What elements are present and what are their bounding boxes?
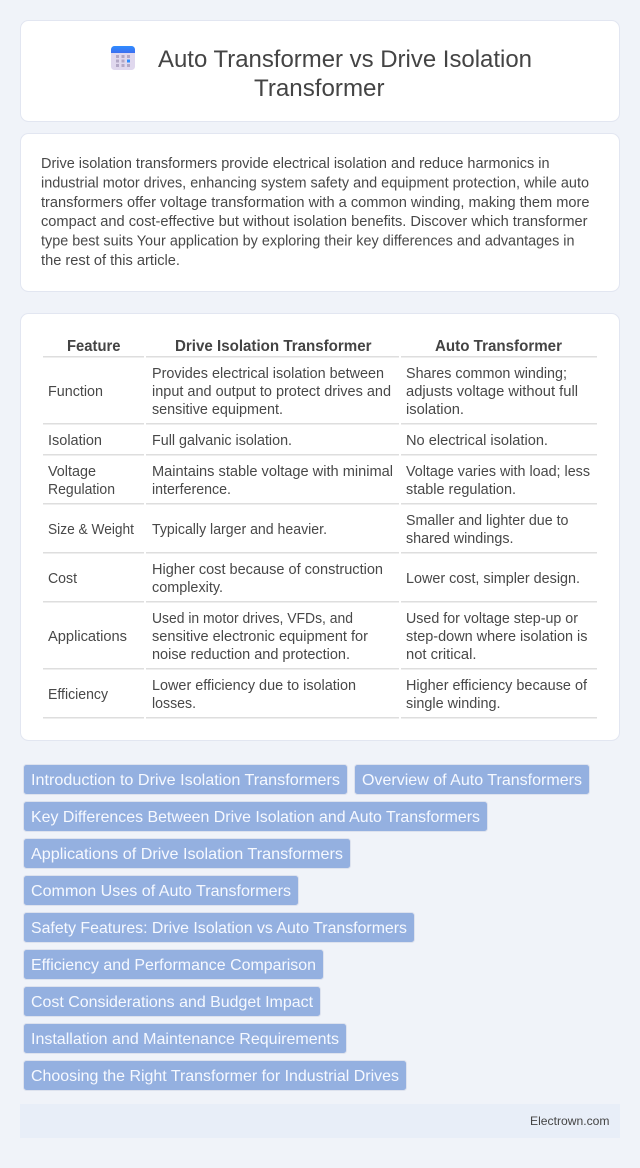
- row: size and weight: [43, 513, 597, 554]
- row: applications: noise reduction and protection.: [152, 647, 350, 663]
- intro text: compact and cost-effective but without isolation benefits. Discover which transformer: [41, 214, 588, 230]
- tag: cost: Cost Considerations and Budget Impact: [31, 994, 314, 1011]
- table header row: Drive Isolation Transformer: [175, 338, 372, 355]
- row: cost: Cost: [48, 571, 77, 587]
- panel: comparison table: [20, 314, 620, 740]
- row: applications: Used in motor drives, VFDs, and: [152, 611, 353, 627]
- row: applications: not critical.: [406, 647, 476, 663]
- panel: introduction: [20, 134, 620, 292]
- row: function: input and output to protect drives and: [152, 384, 391, 400]
- tag: safety features: Safety Features: Drive Isolation vs Auto Transformers: [31, 920, 407, 937]
- intro text: transformers offer voltage transformation with a common winding, making them more: [41, 195, 590, 211]
- row: voltage regulation: Voltage varies with load; less: [406, 464, 590, 480]
- tag: safety features: [24, 912, 414, 942]
- row: cost: [43, 562, 597, 602]
- row: efficiency: Efficiency: [48, 687, 109, 703]
- row: size and weight: Typically larger and heavier.: [152, 522, 327, 538]
- tag: common uses: [24, 876, 298, 906]
- tag: installation: Installation and Maintenance Requirements: [31, 1031, 339, 1048]
- row: function: [43, 366, 597, 424]
- row: efficiency: single winding.: [406, 696, 500, 712]
- row: applications: Applications: [48, 629, 127, 645]
- tag: overview: [354, 764, 590, 794]
- row: efficiency: [43, 678, 597, 718]
- row: efficiency: Higher efficiency because of: [406, 678, 588, 694]
- row: isolation: [43, 433, 597, 456]
- tag: choosing: Choosing the Right Transformer for Industrial Drives: [31, 1068, 399, 1085]
- table header row: [43, 338, 597, 358]
- tag: installation: [24, 1024, 346, 1054]
- row: function: adjusts voltage without full: [406, 384, 578, 400]
- row: voltage regulation: Regulation: [48, 482, 115, 498]
- row: applications: sensitive electronic equipment for: [152, 629, 368, 645]
- panel: header: [20, 20, 620, 122]
- row: efficiency: Lower efficiency due to isolation: [152, 678, 356, 694]
- row: applications: Used for voltage step-up or: [406, 611, 578, 627]
- intro text: type best suits Your application by exploring their key differences and advantages in: [41, 234, 574, 250]
- tag: key differences: [24, 802, 488, 832]
- table header row: Auto Transformer: [435, 338, 562, 355]
- tag: applications: [24, 838, 350, 868]
- title: Transformer: [254, 75, 385, 102]
- row: size and weight: Size & Weight: [48, 522, 134, 538]
- row: voltage regulation: [43, 464, 597, 504]
- row: function: Shares common winding;: [406, 366, 567, 382]
- row: isolation: Full galvanic isolation.: [152, 433, 292, 449]
- title: [158, 46, 532, 102]
- tag: introduction: [24, 764, 348, 794]
- row: voltage regulation: interference.: [152, 482, 231, 498]
- row: cost: Lower cost, simpler design.: [406, 571, 580, 587]
- row: voltage regulation: stable regulation.: [406, 482, 516, 498]
- tag: overview: Overview of Auto Transformers: [362, 772, 582, 789]
- tag: cost: [24, 986, 320, 1016]
- row: isolation: No electrical isolation.: [406, 433, 548, 449]
- row: size and weight: shared windings.: [406, 531, 514, 547]
- row: size and weight: Smaller and lighter due to: [406, 513, 568, 529]
- row: function: Function: [48, 384, 103, 400]
- row: applications: step-down where isolation is: [406, 629, 588, 645]
- row: function: sensitive equipment.: [152, 402, 283, 418]
- table header row: Feature: [67, 338, 121, 355]
- row: isolation: Isolation: [48, 433, 102, 449]
- tag: common uses: Common Uses of Auto Transformers: [31, 883, 291, 900]
- tag: introduction: Introduction to Drive Isolation Transformers: [31, 772, 340, 789]
- row: voltage regulation: Voltage: [48, 464, 96, 480]
- footer: [20, 1104, 620, 1138]
- intro text: the rest of this article.: [41, 253, 180, 269]
- topic tags: [24, 764, 590, 1090]
- tag: efficiency: [24, 950, 324, 980]
- tag: choosing: [24, 1060, 406, 1090]
- intro text: [41, 156, 590, 269]
- row: function: isolation.: [406, 402, 464, 418]
- tag: efficiency: Efficiency and Performance Comparison: [31, 957, 316, 974]
- row: voltage regulation: Maintains stable voltage with minimal: [152, 464, 393, 480]
- intro text: Drive isolation transformers provide electrical isolation and reduce harmonics in: [41, 156, 550, 172]
- icon: calendar: [111, 46, 135, 70]
- tag: applications: Applications of Drive Isolation Transformers: [31, 846, 343, 863]
- footer: Electrown.com: [530, 1114, 610, 1128]
- tag: key differences: Key Differences Between Drive Isolation and Auto Transformers: [31, 809, 480, 826]
- row: efficiency: losses.: [152, 696, 196, 712]
- row: cost: Higher cost because of construction: [152, 562, 383, 578]
- intro text: industrial motor drives, enhancing system safety and equipment protection, while auto: [41, 176, 589, 192]
- row: function: Provides electrical isolation between: [152, 366, 384, 382]
- title: Auto Transformer vs Drive Isolation: [158, 46, 532, 73]
- row: applications: [43, 611, 597, 670]
- row: cost: complexity.: [152, 580, 223, 596]
